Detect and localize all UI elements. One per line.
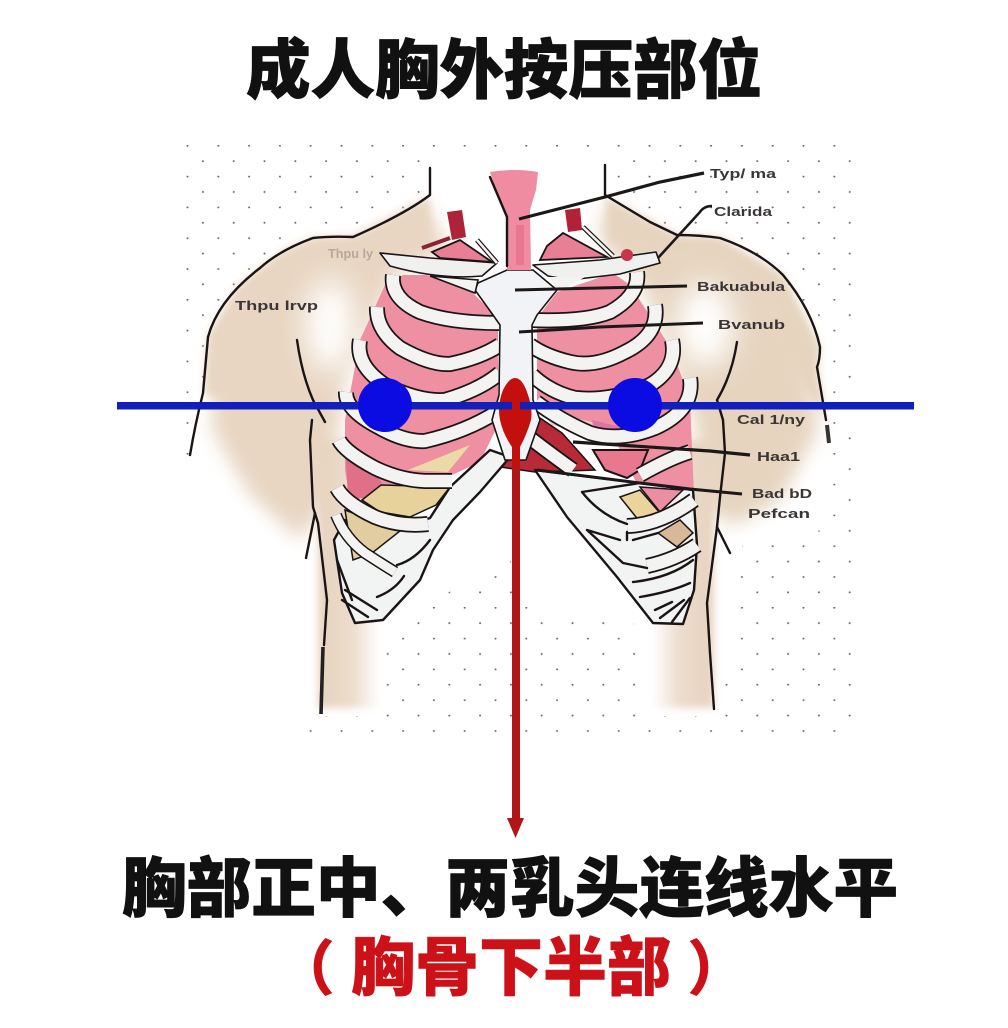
trachea	[490, 170, 538, 270]
right costal cartilage	[535, 470, 697, 624]
right lung	[537, 273, 694, 495]
first rib cartilage segments	[430, 276, 585, 293]
label: faded clavicle text: Thpu ly	[328, 246, 374, 261]
label: sternum manubrium pointer	[515, 279, 786, 294]
label: trachea pointer	[519, 166, 777, 219]
red sub caption: （	[275, 936, 335, 1003]
blue nipple line, left segment	[117, 402, 512, 410]
red arrow marking lower sternum	[499, 378, 532, 838]
label: diaphragm pointer: Bad bD	[752, 486, 812, 501]
right clavicle	[533, 252, 660, 280]
heart (dark red region)	[500, 410, 648, 478]
left clavicle	[380, 253, 497, 277]
yellow and tan tissue	[345, 445, 693, 560]
label: sternum manubrium pointer: Bakuabula	[697, 279, 786, 294]
red sub caption	[275, 932, 747, 1004]
blue dot left nipple	[358, 378, 412, 432]
left lung	[345, 275, 498, 500]
upper lung apexes and vessels	[422, 208, 633, 263]
label: rib pointer	[519, 317, 785, 332]
dotted grid backdrop	[186, 145, 856, 740]
body outlines	[190, 165, 829, 714]
right ribs	[530, 272, 697, 622]
label: diaphragm pointer: Pefcan	[748, 506, 810, 521]
label: cal text: Cal 1/ny	[737, 412, 806, 427]
label: clavicle pointer: Clarida	[714, 204, 773, 219]
bottom caption: 胸部正中、两乳头连线水平	[122, 852, 898, 925]
label: clavicle pointer	[658, 204, 773, 258]
left ribs	[336, 275, 500, 617]
blue nipple line, right segment	[520, 402, 914, 410]
white mask over dots behind the body	[180, 160, 830, 745]
label: diaphragm pointer	[537, 470, 812, 521]
title: 成人胸外按压部位	[246, 35, 762, 107]
red sub caption: ）	[687, 936, 747, 1003]
label: heart pointer: Haa1	[757, 449, 800, 464]
red sub caption: 胸骨下半部	[351, 932, 671, 1004]
label: trachea pointer: Typ/ ma	[710, 166, 777, 181]
anatomical chest illustration	[190, 165, 829, 714]
label: rib pointer: Bvanub	[718, 317, 785, 332]
left costal cartilage	[334, 450, 510, 623]
blue dot right nipple	[608, 378, 662, 432]
skin shading	[205, 197, 825, 708]
label: shoulder text: Thpu lrvp	[235, 298, 318, 313]
label: heart pointer	[573, 442, 800, 464]
sternum	[475, 270, 557, 460]
darker pink lung shading	[345, 440, 382, 500]
